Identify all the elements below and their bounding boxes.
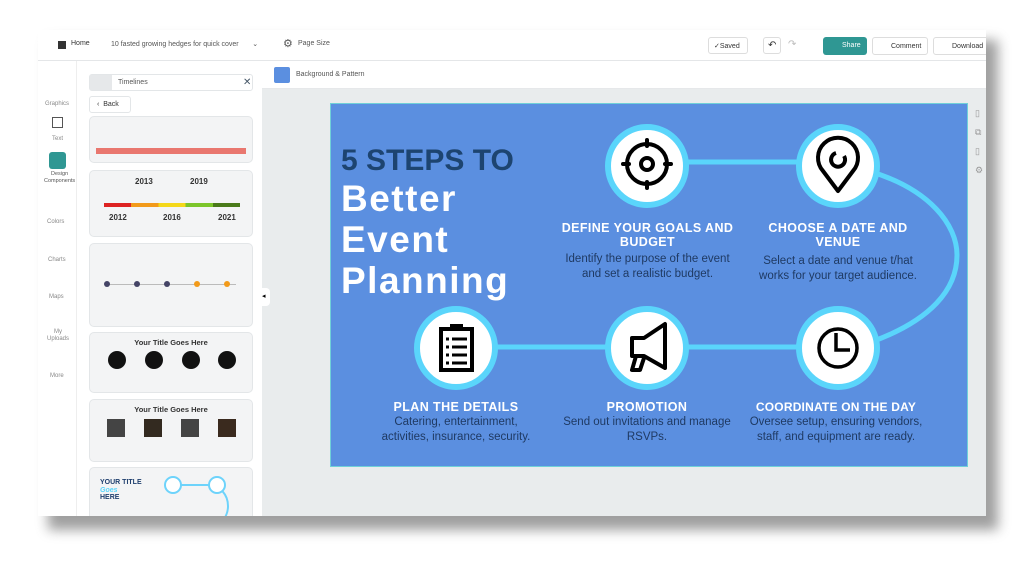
top toolbar: ↷ xyxy=(788,39,796,50)
card 4: Your Title Goes Here xyxy=(134,338,208,347)
card 2 timeline: 2013 xyxy=(135,177,153,186)
top toolbar: Download xyxy=(952,43,983,50)
text: Oversee setup, ensuring vendors, staff, and equipment are ready. xyxy=(750,416,922,442)
circle: goals xyxy=(608,127,686,205)
top toolbar: ↶ xyxy=(768,40,776,51)
text: DEFINE YOUR GOALS AND BUDGET xyxy=(562,221,733,249)
card 6: Goes xyxy=(100,486,118,494)
card 3 xyxy=(89,243,253,327)
circle: clipboard xyxy=(417,309,495,387)
left icon rail: Graphics xyxy=(45,101,69,107)
side panel xyxy=(77,61,262,516)
search: ✕ xyxy=(243,77,251,88)
top toolbar: ⚙ xyxy=(283,38,293,50)
left icon rail: Colors xyxy=(47,219,64,225)
secondary bar: Background & Pattern xyxy=(296,71,364,78)
top toolbar: Page Size xyxy=(298,40,330,47)
left icon rail: My xyxy=(54,329,62,335)
right tool icons: ⚙ xyxy=(975,165,983,175)
top toolbar: Home xyxy=(71,40,90,47)
app window: ◂ xyxy=(262,293,266,300)
card 2 timeline: 2019 xyxy=(190,177,208,186)
step 4 text xyxy=(563,400,731,442)
text: Send out invitations and manage RSVPs. xyxy=(563,416,731,442)
secondary bar xyxy=(262,61,986,89)
infographic xyxy=(330,103,968,467)
left icon rail xyxy=(38,61,77,516)
text: Select a date and venue t/hat works for your target audience. xyxy=(759,255,917,282)
card 2 timeline: 2021 xyxy=(218,213,236,222)
right tool icons: ⧉ xyxy=(975,127,981,137)
title xyxy=(341,144,514,301)
share button xyxy=(823,37,867,55)
circle: clock xyxy=(799,309,877,387)
canvas area xyxy=(262,89,986,516)
text: PROMOTION xyxy=(607,400,687,414)
card 2 timeline: 2016 xyxy=(163,213,181,222)
card 1 xyxy=(89,116,253,163)
card 6 xyxy=(89,467,253,527)
title: Better xyxy=(341,178,457,219)
title: Planning xyxy=(341,260,509,301)
step 1 text xyxy=(562,221,733,280)
circle: venue xyxy=(799,127,877,205)
connector path xyxy=(456,162,957,347)
text: Identify the purpose of the event and set a realistic budget. xyxy=(565,253,730,280)
card 4 xyxy=(89,332,253,393)
left icon rail: More xyxy=(50,373,64,379)
card 2 timeline: 2012 xyxy=(109,213,127,222)
left icon rail: Maps xyxy=(49,294,64,300)
side panel: ‹ Back xyxy=(97,101,119,108)
card 2 timeline xyxy=(89,170,253,237)
left icon rail: Components xyxy=(44,178,75,184)
title: 5 STEPS TO xyxy=(341,144,514,177)
top toolbar xyxy=(38,30,986,61)
step 2 text xyxy=(759,221,917,282)
text: PLAN THE DETAILS xyxy=(394,400,518,414)
card 6: HERE xyxy=(100,494,119,501)
share button: Share xyxy=(842,42,861,49)
step 5 text xyxy=(750,400,922,442)
left icon rail: Uploads xyxy=(47,336,69,342)
card 6: YOUR TITLE xyxy=(100,479,142,486)
top toolbar: Comment xyxy=(891,43,921,50)
top toolbar: 10 fasted growing hedges for quick cover ⌄ xyxy=(111,41,258,48)
right tool icons xyxy=(975,108,983,175)
search xyxy=(89,74,253,91)
text: CHOOSE A DATE AND VENUE xyxy=(768,221,908,249)
top toolbar: ✓Saved xyxy=(714,43,740,50)
left icon rail: Charts xyxy=(48,257,66,263)
text: Catering, entertainment, activities, insurance, security. xyxy=(382,416,530,442)
left icon rail: Design xyxy=(51,171,68,177)
left icon rail: Text xyxy=(52,136,63,142)
circle: promotion xyxy=(608,309,686,387)
step 3 text xyxy=(382,400,530,442)
right tool icons: ▯ xyxy=(975,108,980,118)
search: Timelines xyxy=(118,79,148,86)
title: Event xyxy=(341,219,449,260)
card 5 xyxy=(89,399,253,462)
right tool icons: ▯ xyxy=(975,146,980,156)
text: COORDINATE ON THE DAY xyxy=(756,400,916,414)
card 5: Your Title Goes Here xyxy=(134,405,208,414)
